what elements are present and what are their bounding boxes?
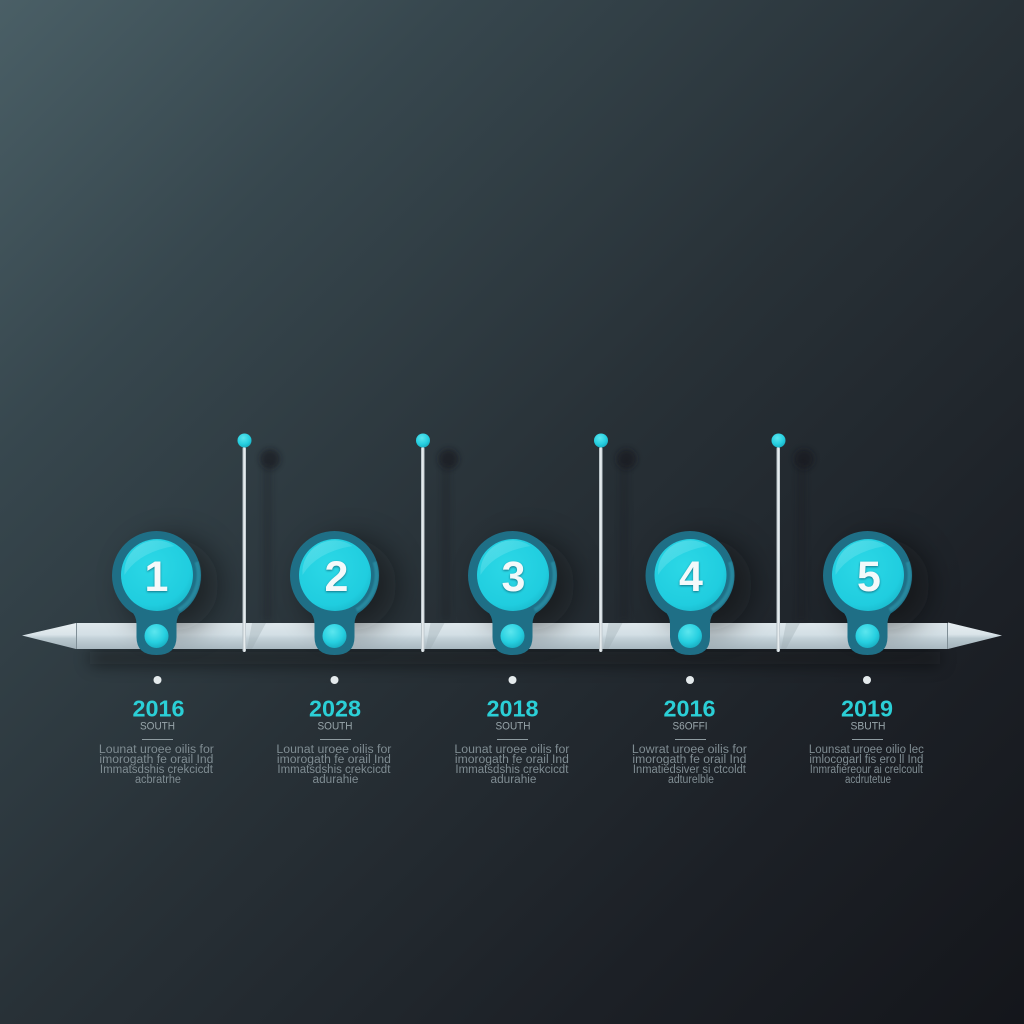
column 5 text xyxy=(809,676,927,786)
description 5: acdrutetue xyxy=(845,774,891,786)
pin 1 xyxy=(238,434,280,652)
column 3 text xyxy=(454,676,573,786)
description 5: Lounsat uroee oilio lec xyxy=(809,744,924,756)
pin 3 xyxy=(594,434,636,652)
description 2: Lounat uroee oilis for xyxy=(276,744,392,756)
timeline bar xyxy=(22,622,1002,665)
description 4: imorogath fe orail Ind xyxy=(632,754,746,766)
description 1: acbratrhe xyxy=(135,774,181,786)
description 4: adturelble xyxy=(668,774,714,786)
marker 2 xyxy=(290,531,396,655)
year 4: 2016 xyxy=(664,696,716,722)
description 1: Lounat uroee oilis for xyxy=(99,744,214,756)
region 3: SOUTH xyxy=(496,720,531,732)
description 3: Immatsdshis crekcicdt xyxy=(455,764,569,776)
description 2: adurahie xyxy=(312,774,358,786)
bar body xyxy=(76,623,948,649)
column 2 text xyxy=(276,676,395,786)
left arrow tip xyxy=(22,623,76,649)
region 4: S6OFFI xyxy=(672,720,708,732)
description 2: Immatsdshis crekcicdt xyxy=(277,764,391,776)
year 5: 2019 xyxy=(841,696,893,722)
column 1 text xyxy=(99,676,217,786)
pin 2 xyxy=(416,434,458,652)
year 3: 2018 xyxy=(486,696,539,722)
number 1: 1 xyxy=(145,553,168,601)
marker 1 xyxy=(112,531,218,655)
description 3: imorogath fe orail Ind xyxy=(455,754,569,766)
region 5: SBUTH xyxy=(850,720,886,732)
right arrow tip xyxy=(948,622,1002,649)
marker 3 xyxy=(468,531,574,655)
pin 4 xyxy=(772,434,814,652)
year 1: 2016 xyxy=(132,696,184,722)
number 5: 5 xyxy=(857,553,881,601)
description 5: imlocogarl fis ero ll Ind xyxy=(809,754,923,766)
marker 5 xyxy=(823,531,930,655)
description 5: Inmrafiereour ai crelcoult xyxy=(810,764,924,776)
description 4: Inmatiedsiver si ctcoldt xyxy=(633,764,747,776)
description 3: Lounat uroee oilis for xyxy=(454,744,570,756)
description 1: imorogath fe orail Ind xyxy=(99,754,213,766)
number 4: 4 xyxy=(679,553,703,601)
description 3: adurahie xyxy=(490,774,536,786)
number 3: 3 xyxy=(502,553,525,601)
column 4 text xyxy=(632,676,750,786)
year 2: 2028 xyxy=(309,696,361,722)
marker 4 xyxy=(646,531,752,655)
region 2: SOUTH xyxy=(318,720,353,732)
region 1: SOUTH xyxy=(140,720,175,732)
description 1: Immatsdshis crekcicdt xyxy=(100,764,214,776)
description 2: imorogath fe orail Ind xyxy=(277,754,391,766)
number 2: 2 xyxy=(325,553,348,601)
description 4: Lowrat uroee oilis for xyxy=(632,744,747,756)
